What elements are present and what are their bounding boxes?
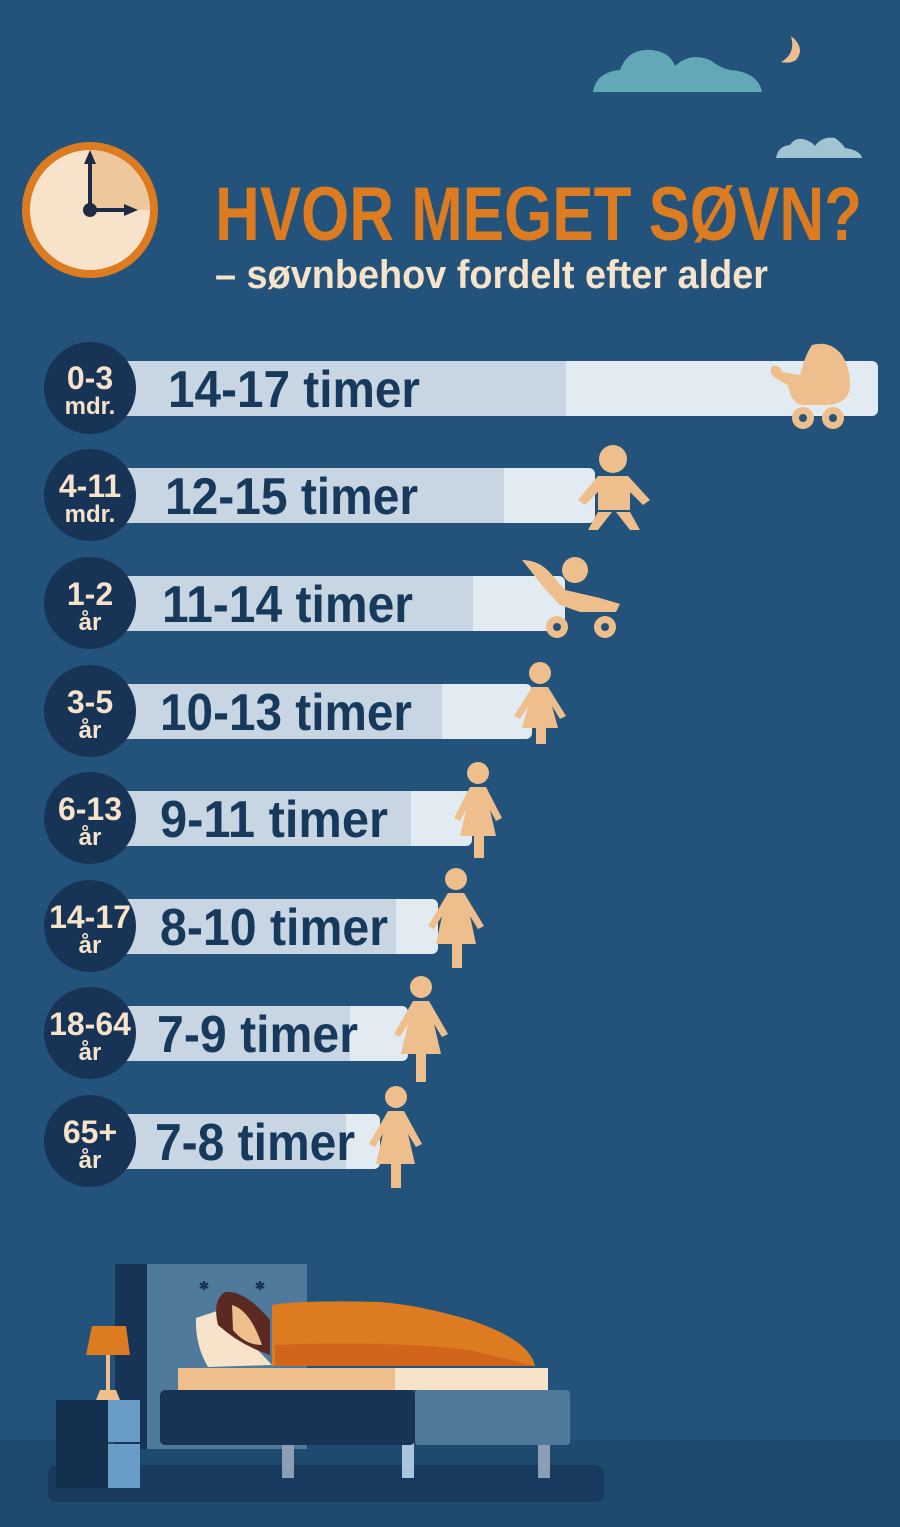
icon: cloud large xyxy=(593,50,762,92)
row: 4-11 mdr: 4-11 xyxy=(59,468,121,504)
row: 65+ år: år xyxy=(79,1147,101,1174)
row: 3-5 år: 10-13 timer xyxy=(160,684,412,742)
icon: stroller child xyxy=(522,557,620,638)
icon: cloud small xyxy=(776,138,862,158)
row: 0-3 mdr: 0-3 xyxy=(67,360,113,396)
illustration: sleeping woman in bed: ✱ xyxy=(255,1279,265,1293)
icon: child xyxy=(514,662,566,744)
illustration: sleeping woman in bed xyxy=(48,1264,604,1502)
row: 14-17 år: 14-17 xyxy=(49,899,131,935)
icon: pram xyxy=(771,344,850,429)
row: 1-2 år xyxy=(44,557,620,649)
row: 6-13 år: år xyxy=(79,824,101,851)
row: 65+ år: 7-8 timer xyxy=(155,1114,355,1172)
subtitle: – søvnbehov fordelt efter alder xyxy=(215,253,768,297)
row: 0-3 mdr xyxy=(44,342,878,434)
row: 65+ år xyxy=(44,1086,422,1188)
row: 18-64 år: 18-64 xyxy=(49,1006,131,1042)
icon: clock xyxy=(26,146,154,274)
illustration: sleeping woman in bed: ✱ xyxy=(199,1279,209,1293)
icon: senior xyxy=(369,1086,422,1188)
row: 6-13 år xyxy=(44,762,502,864)
row: 14-17 år: år xyxy=(79,932,101,959)
icon: moon xyxy=(781,36,800,63)
icon: baby xyxy=(578,445,650,530)
row: 3-5 år: år xyxy=(79,717,101,744)
row: 65+ år: 65+ xyxy=(63,1114,117,1150)
row: 4-11 mdr: mdr. xyxy=(65,501,115,528)
row: 6-13 år: 6-13 xyxy=(58,791,122,827)
row: 3-5 år: 3-5 xyxy=(67,684,113,720)
row: 18-64 år xyxy=(44,976,448,1082)
row: 3-5 år xyxy=(44,662,566,757)
row: 6-13 år: 9-11 timer xyxy=(160,791,388,849)
row: 0-3 mdr: mdr. xyxy=(65,393,115,420)
row: 1-2 år: år xyxy=(79,609,101,636)
row: 1-2 år: 11-14 timer xyxy=(162,576,413,634)
icon: adult xyxy=(394,976,448,1082)
row: 1-2 år: 1-2 xyxy=(67,576,113,612)
row: 18-64 år: 7-9 timer xyxy=(157,1006,358,1064)
row: 4-11 mdr: 12-15 timer xyxy=(165,468,418,526)
row: 14-17 år xyxy=(44,868,484,972)
row: 18-64 år: år xyxy=(79,1039,101,1066)
row: 4-11 mdr xyxy=(44,445,650,541)
row: 0-3 mdr: 14-17 timer xyxy=(168,361,420,419)
row: 14-17 år: 8-10 timer xyxy=(160,899,388,957)
icon: teen xyxy=(428,868,484,968)
icon: girl xyxy=(454,762,502,858)
